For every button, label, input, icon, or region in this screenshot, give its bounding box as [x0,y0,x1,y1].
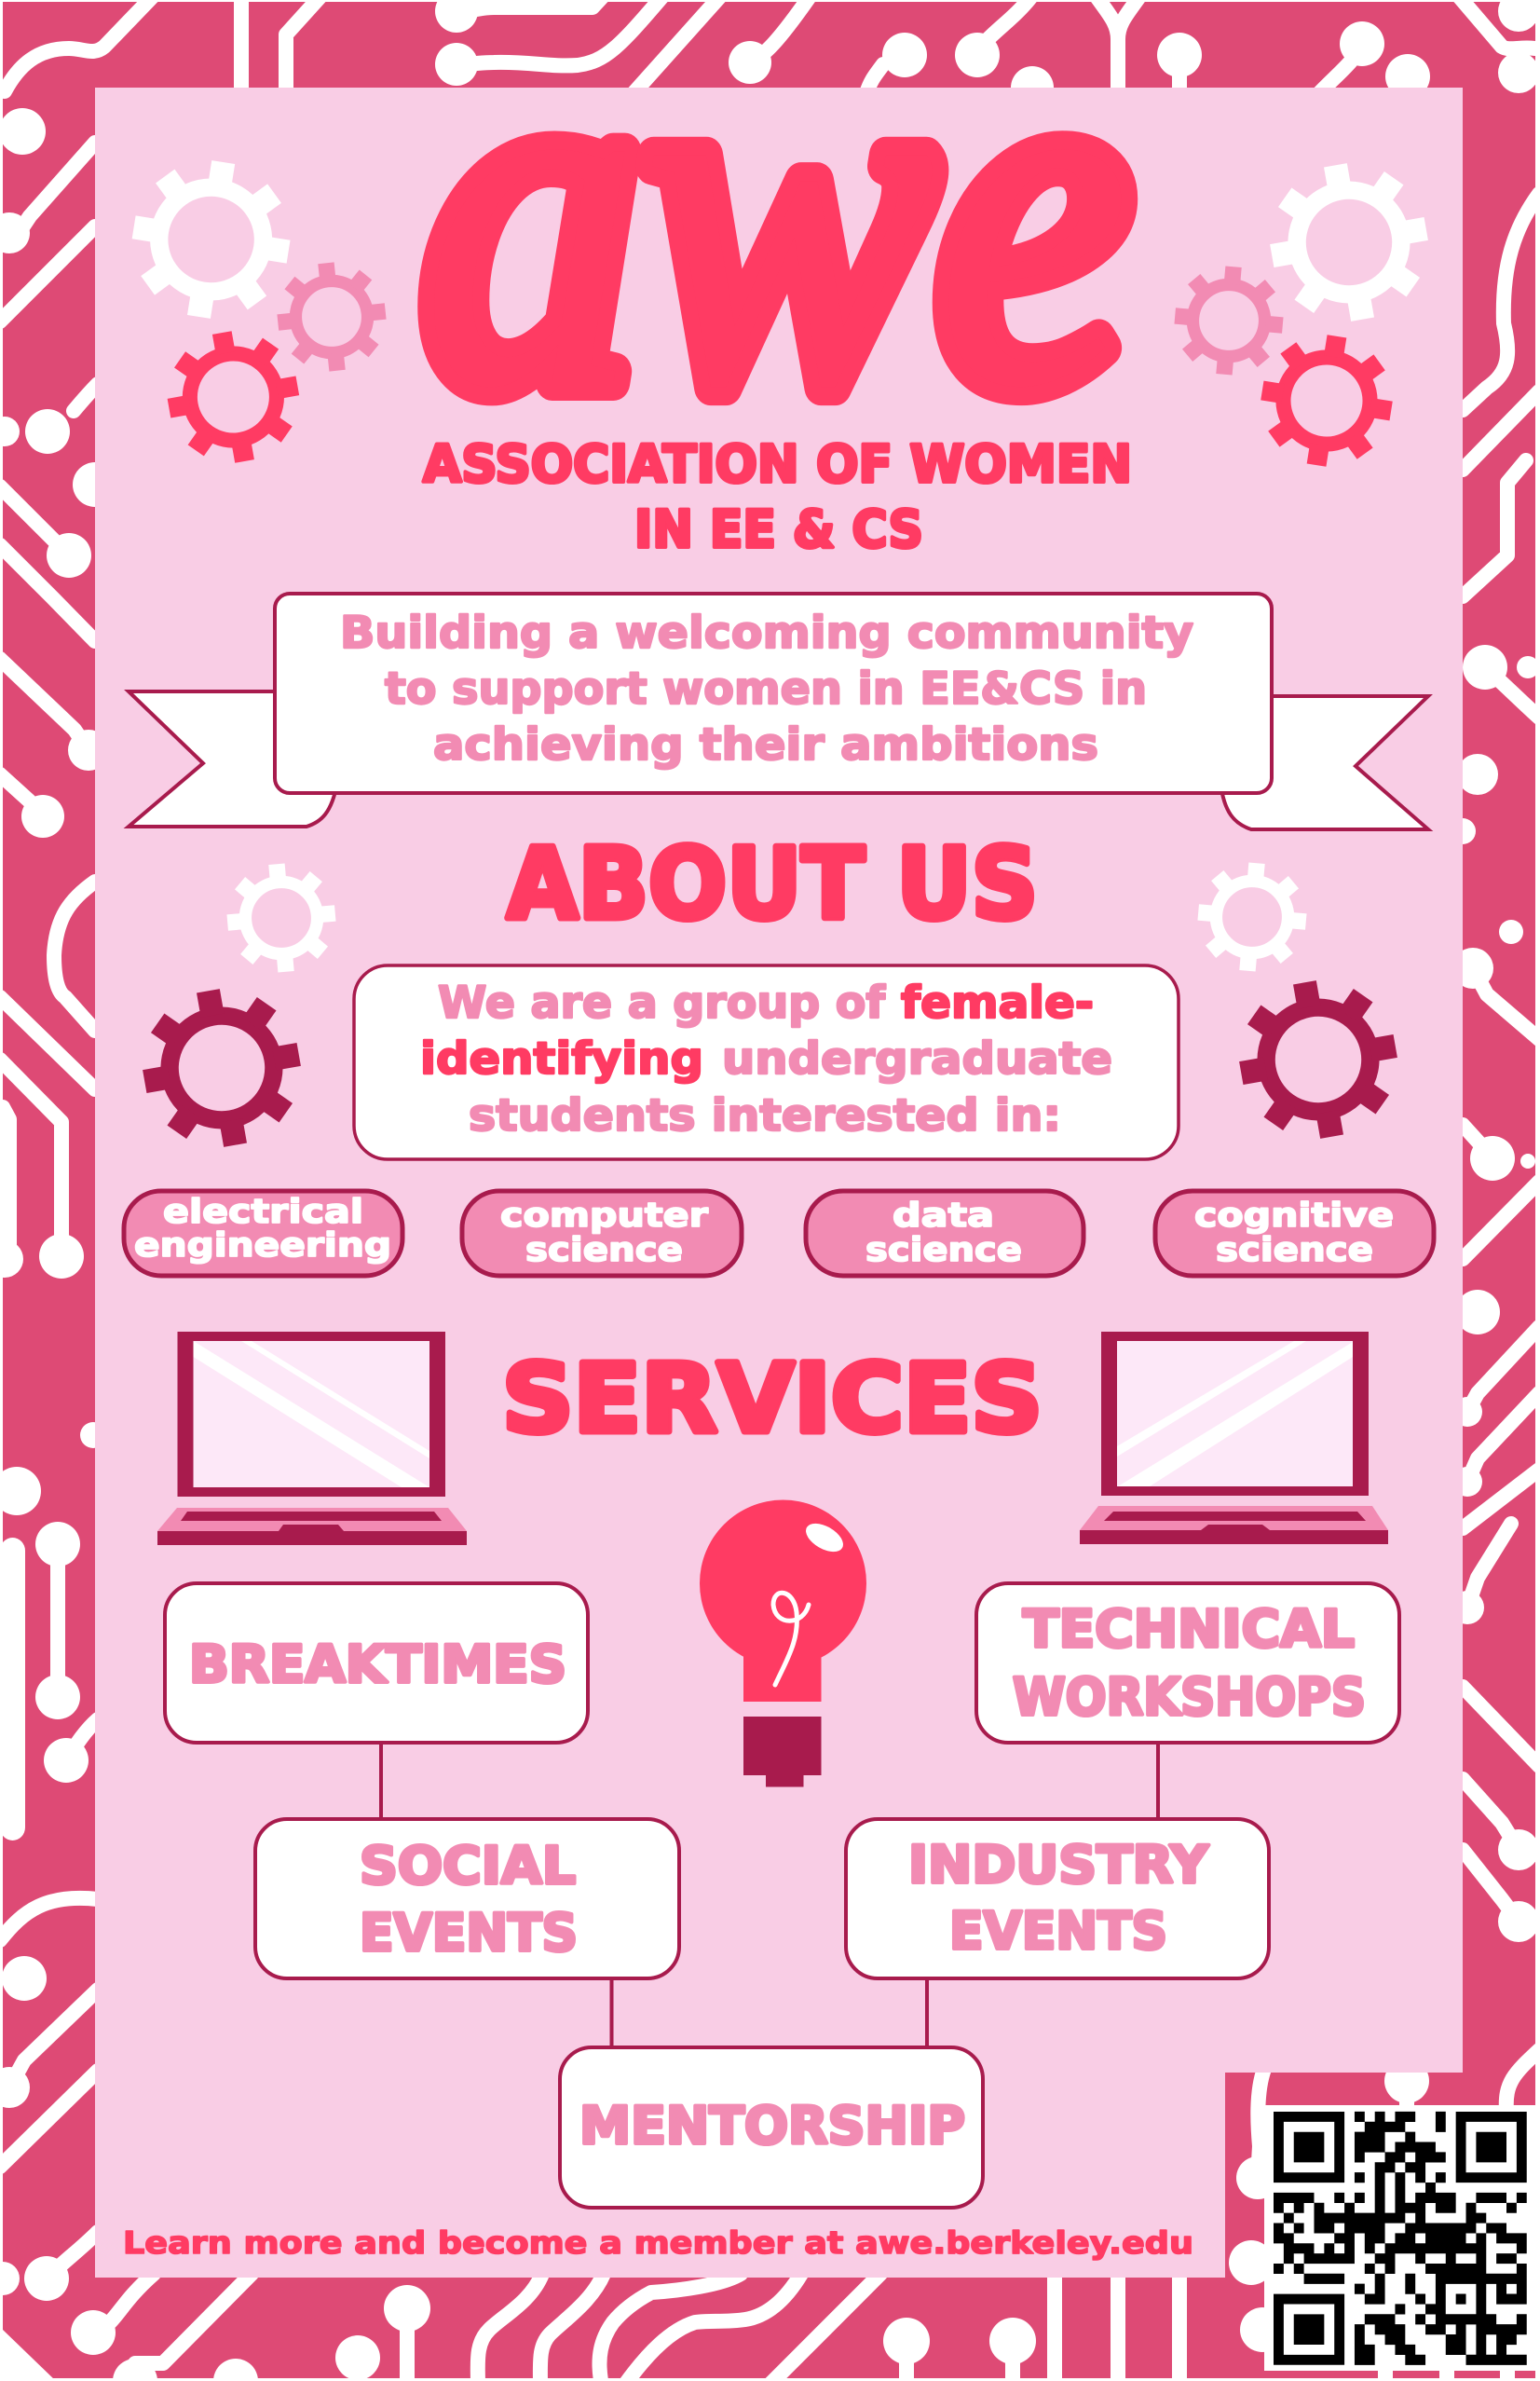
heading: association name [423,434,1132,559]
service: social events [255,1819,679,1978]
service: breaktimes [165,1583,588,1743]
gear: top left pink [272,257,391,376]
about text: We are a group of [438,978,886,1029]
about text: female- [901,978,1094,1029]
pill: electrical engineering: engineering [134,1226,391,1265]
pill: data science [806,1191,1083,1276]
connector lines [381,1744,1158,2047]
heading: association name: IN EE & CS [634,499,923,559]
service: technical workshops: WORKSHOPS [1013,1667,1366,1727]
ribbon tail right [1220,696,1428,829]
gear: top right red [1252,326,1401,475]
gear: top right white [1259,152,1439,333]
about text: identifying [420,1033,703,1085]
banner text: Building a welcoming community [340,608,1193,659]
ribbon tail left [129,691,337,827]
service: industry events [846,1819,1269,1978]
icon: light bulb [700,1500,866,1787]
service: social events: EVENTS [360,1903,578,1963]
about text: undergraduate [722,1033,1112,1085]
banner box [275,594,1272,793]
service: mentorship [560,2047,983,2208]
gear: about left white [223,859,340,977]
service: industry events: INDUSTRY [908,1835,1209,1895]
pill: data science: science [865,1231,1022,1269]
icon: laptop left [157,1332,467,1545]
pill: cognitive science [1155,1191,1434,1276]
gear: about left dark [131,978,312,1158]
gear: about right white [1193,858,1311,976]
pill: cognitive science: science [1216,1231,1373,1269]
pill: cognitive science: cognitive [1194,1197,1394,1235]
gear: top left red [157,322,308,472]
pill: computer science: science [525,1231,683,1269]
service: technical workshops: TECHNICAL [1023,1599,1355,1659]
gear: top left white [121,150,301,329]
heading: services: SERVICES [502,1344,1043,1455]
service: industry events: EVENTS [949,1901,1167,1961]
icon: laptop right [1080,1332,1388,1544]
pill: electrical engineering: electrical [163,1193,363,1231]
service: mentorship: MENTORSHIP [579,2096,965,2155]
service: technical workshops [976,1583,1399,1743]
ribbon banner [129,594,1428,829]
pill: electrical engineering [124,1191,402,1276]
qr code [1264,2105,1535,2371]
pill: computer science: computer [500,1197,708,1235]
service: social events: SOCIAL [360,1836,576,1895]
heading: association name: ASSOCIATION OF WOMEN [423,434,1132,494]
gear: about right dark [1228,969,1409,1150]
heading: about us: ABOUT US [507,828,1038,941]
pill: data science: data [893,1197,994,1235]
banner text [340,608,1193,771]
about text: students interested in: [469,1090,1061,1142]
about text [420,978,1112,1142]
gear: top right pink [1170,262,1288,379]
banner text: to support women in EE&CS in [385,664,1147,715]
pill: computer science [462,1191,742,1276]
service: breaktimes: BREAKTIMES [189,1635,566,1694]
banner text: achieving their ambitions [433,719,1098,771]
about text box [354,965,1179,1159]
footer link text: Learn more and become a member at awe.berkeley.edu [123,2224,1193,2261]
